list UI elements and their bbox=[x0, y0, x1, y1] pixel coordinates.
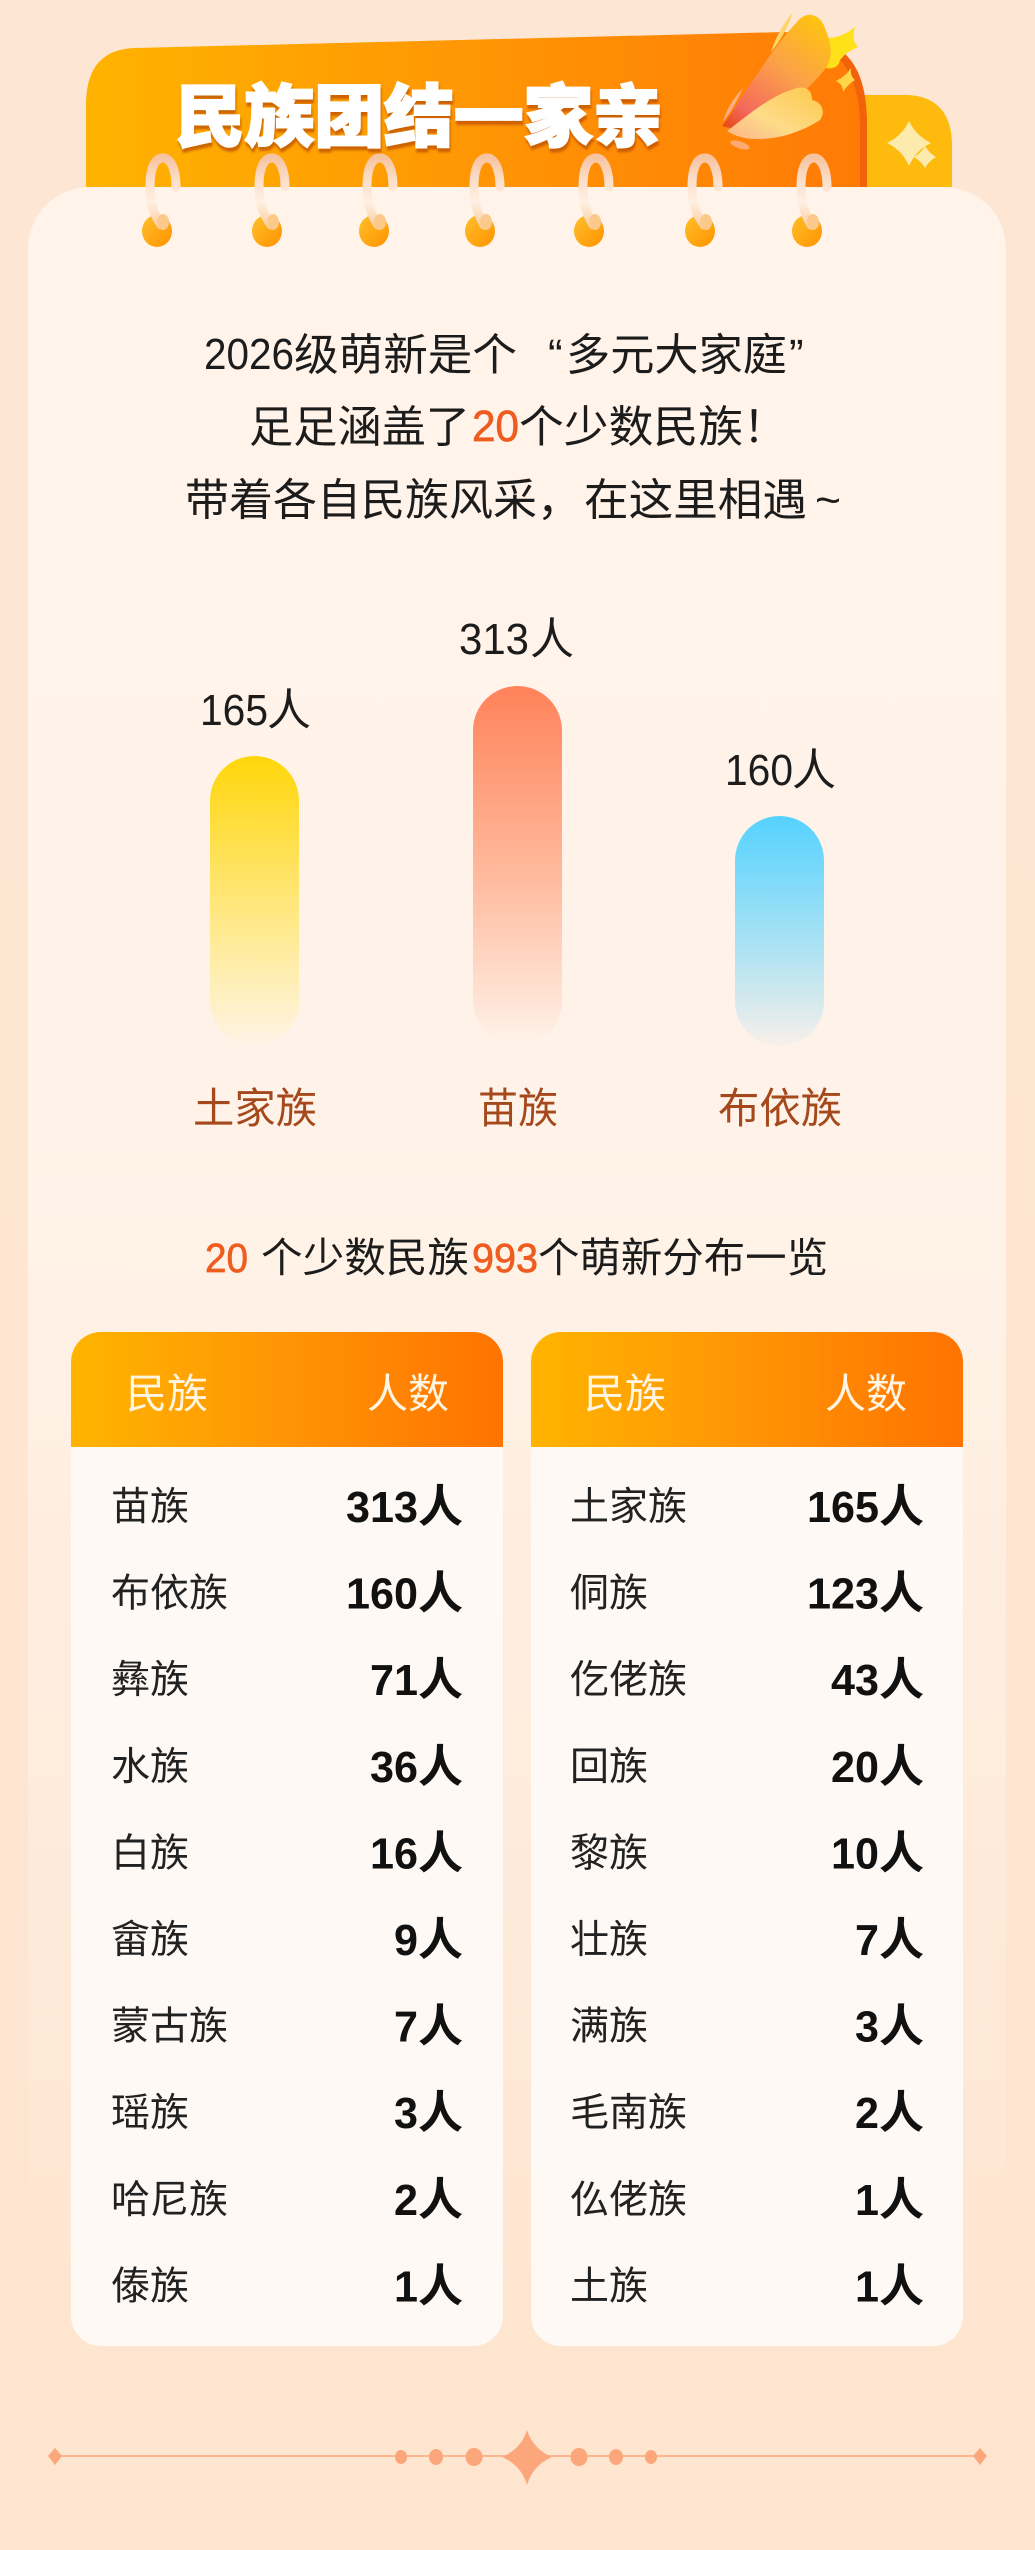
row 哈尼族: 2 bbox=[394, 2176, 418, 2225]
table header: 人数 bbox=[825, 1371, 907, 1417]
row 黎族: 黎族 bbox=[570, 1832, 648, 1875]
row 白族 bbox=[111, 1827, 463, 1878]
row 瑶族: 3 bbox=[394, 2089, 418, 2138]
bar: Miao: 313 bbox=[459, 615, 529, 664]
row 水族 bbox=[111, 1741, 463, 1792]
row 傣族: 人 bbox=[418, 2260, 463, 2311]
row 傣族: 1 bbox=[394, 2262, 418, 2311]
table header: 人数 bbox=[367, 1371, 449, 1417]
row 水族: 36 bbox=[370, 1743, 418, 1792]
row 畲族: 畲族 bbox=[111, 1919, 189, 1962]
row 蒙古族 bbox=[111, 2001, 463, 2052]
table heading: 个萌新分布一览 bbox=[538, 1235, 828, 1281]
row 畲族: 9 bbox=[394, 1916, 418, 1965]
table heading: 20 bbox=[205, 1235, 248, 1281]
row 满族 bbox=[570, 2001, 924, 2052]
row 壮族: 壮族 bbox=[570, 1919, 648, 1962]
row 彝族: 人 bbox=[418, 1654, 463, 1705]
intro line 1: 多元大家庭 bbox=[566, 331, 787, 380]
row 满族: 人 bbox=[879, 2001, 924, 2052]
intro line 2: 足足涵盖了 bbox=[249, 403, 470, 452]
row 蒙古族: 蒙古族 bbox=[111, 2006, 228, 2049]
bar: Buyi: 160 bbox=[725, 746, 793, 795]
row 黎族: 人 bbox=[879, 1827, 924, 1878]
row 回族 bbox=[570, 1741, 924, 1792]
row 彝族 bbox=[111, 1654, 463, 1705]
row 苗族 bbox=[111, 1481, 463, 1532]
row 壮族: 人 bbox=[879, 1914, 924, 1965]
row 回族: 人 bbox=[879, 1741, 924, 1792]
row 壮族: 7 bbox=[855, 1916, 879, 1965]
title text: 民族团结一家亲 bbox=[175, 80, 663, 156]
icon: sparkle on tab bbox=[887, 121, 936, 168]
bar: Miao bbox=[459, 615, 574, 1132]
intro line 2: 20 bbox=[472, 402, 519, 451]
footer ornament bbox=[48, 2430, 987, 2485]
row 彝族: 彝族 bbox=[111, 1659, 189, 1702]
row 土家族: 土家族 bbox=[570, 1486, 687, 1529]
row 仫佬族 bbox=[570, 2174, 924, 2225]
table: right column bbox=[531, 1332, 963, 2346]
row 土家族 bbox=[570, 1481, 924, 1532]
intro line 1: ” bbox=[789, 331, 804, 380]
ring 7 bbox=[792, 158, 827, 247]
row 仡佬族: 43 bbox=[831, 1656, 879, 1705]
row 白族: 人 bbox=[418, 1827, 463, 1878]
row 瑶族 bbox=[111, 2087, 463, 2138]
row 土族: 土族 bbox=[570, 2265, 648, 2308]
intro line 1: “ bbox=[548, 331, 563, 380]
row 土族: 1 bbox=[855, 2262, 879, 2311]
row 傣族: 傣族 bbox=[111, 2265, 189, 2308]
row 侗族: 123 bbox=[807, 1570, 879, 1619]
row 土族: 人 bbox=[879, 2260, 924, 2311]
icon: wing and stars bbox=[722, 12, 858, 151]
title banner bbox=[86, 32, 867, 187]
intro line 2 bbox=[249, 402, 787, 452]
row 毛南族: 人 bbox=[879, 2087, 924, 2138]
bar: Tujia bbox=[193, 686, 317, 1132]
table: left column bbox=[71, 1332, 503, 2346]
row 仫佬族: 人 bbox=[879, 2174, 924, 2225]
row 土家族: 165 bbox=[807, 1483, 879, 1532]
bar: Buyi bbox=[718, 746, 842, 1132]
bar chart: top three groups bbox=[193, 615, 842, 1132]
intro line 1: 2026 bbox=[204, 330, 294, 379]
table heading: 个少数民族 bbox=[261, 1235, 469, 1281]
row 布依族 bbox=[111, 1568, 463, 1619]
bar: Miao: 苗族 bbox=[478, 1085, 558, 1132]
table header bbox=[531, 1332, 963, 1447]
row 仡佬族: 人 bbox=[879, 1654, 924, 1705]
bar: Tujia: 165 bbox=[200, 686, 268, 735]
intro line 3: 在这里相遇 bbox=[584, 476, 807, 525]
spiral rings bbox=[142, 158, 827, 247]
row 苗族: 苗族 bbox=[111, 1486, 189, 1529]
row 仫佬族: 仫佬族 bbox=[570, 2179, 687, 2222]
table heading bbox=[205, 1235, 828, 1281]
row 哈尼族 bbox=[111, 2174, 463, 2225]
row 畲族: 人 bbox=[418, 1914, 463, 1965]
row 傣族 bbox=[111, 2260, 463, 2311]
row 布依族: 160 bbox=[346, 1570, 418, 1619]
row 侗族 bbox=[570, 1568, 924, 1619]
row 苗族: 313 bbox=[346, 1483, 418, 1532]
bar: Tujia: 人 bbox=[267, 686, 311, 735]
row 蒙古族: 7 bbox=[394, 2003, 418, 2052]
table header: 民族 bbox=[584, 1371, 666, 1417]
row 回族: 20 bbox=[831, 1743, 879, 1792]
row 满族: 3 bbox=[855, 2003, 879, 2052]
row 畲族 bbox=[111, 1914, 463, 1965]
row 侗族: 侗族 bbox=[570, 1573, 648, 1616]
intro line 1: 级萌新是个 bbox=[294, 331, 517, 380]
row 侗族: 人 bbox=[879, 1568, 924, 1619]
row 壮族 bbox=[570, 1914, 924, 1965]
intro line 3: 带着各自民族风采， bbox=[185, 476, 581, 525]
table header bbox=[71, 1332, 503, 1447]
bar: Miao: 人 bbox=[530, 615, 574, 664]
row 水族: 人 bbox=[418, 1741, 463, 1792]
row 蒙古族: 人 bbox=[418, 2001, 463, 2052]
row 土族 bbox=[570, 2260, 924, 2311]
row 仫佬族: 1 bbox=[855, 2176, 879, 2225]
row 满族: 满族 bbox=[570, 2006, 648, 2049]
ring 2 bbox=[252, 158, 285, 247]
ring 5 bbox=[574, 158, 609, 247]
row 苗族: 人 bbox=[418, 1481, 463, 1532]
ring 3 bbox=[359, 158, 393, 247]
bar: Tujia: 土家族 bbox=[193, 1085, 317, 1132]
row 回族: 回族 bbox=[570, 1746, 648, 1789]
ring 4 bbox=[465, 158, 500, 247]
row 彝族: 71 bbox=[370, 1656, 418, 1705]
bar: Buyi: 布依族 bbox=[718, 1085, 842, 1132]
row 黎族 bbox=[570, 1827, 924, 1878]
bar: Buyi: 人 bbox=[792, 746, 836, 795]
row 布依族: 布依族 bbox=[111, 1573, 228, 1616]
right folder tab bbox=[860, 95, 952, 187]
intro line 2: 个少数民族 bbox=[519, 403, 743, 452]
row 哈尼族: 人 bbox=[418, 2174, 463, 2225]
row 布依族: 人 bbox=[418, 1568, 463, 1619]
table header: 民族 bbox=[126, 1371, 208, 1417]
row 瑶族: 人 bbox=[418, 2087, 463, 2138]
row 水族: 水族 bbox=[111, 1746, 189, 1789]
row 哈尼族: 哈尼族 bbox=[111, 2179, 228, 2222]
ring 6 bbox=[685, 158, 718, 247]
intro line 2: ！ bbox=[743, 403, 787, 452]
intro line 3: ~ bbox=[815, 476, 841, 525]
row 黎族: 10 bbox=[831, 1829, 879, 1878]
intro text bbox=[185, 330, 841, 525]
table heading: 993 bbox=[472, 1235, 538, 1281]
row 毛南族: 2 bbox=[855, 2089, 879, 2138]
intro line 1 bbox=[204, 330, 804, 380]
row 白族: 白族 bbox=[111, 1832, 189, 1875]
ring 1 bbox=[142, 158, 176, 247]
row 瑶族: 瑶族 bbox=[111, 2092, 189, 2135]
row 仡佬族 bbox=[570, 1654, 924, 1705]
row 毛南族: 毛南族 bbox=[570, 2092, 687, 2135]
row 白族: 16 bbox=[370, 1829, 418, 1878]
intro line 3 bbox=[185, 476, 841, 525]
row 土家族: 人 bbox=[879, 1481, 924, 1532]
row 毛南族 bbox=[570, 2087, 924, 2138]
row 仡佬族: 仡佬族 bbox=[570, 1659, 687, 1702]
